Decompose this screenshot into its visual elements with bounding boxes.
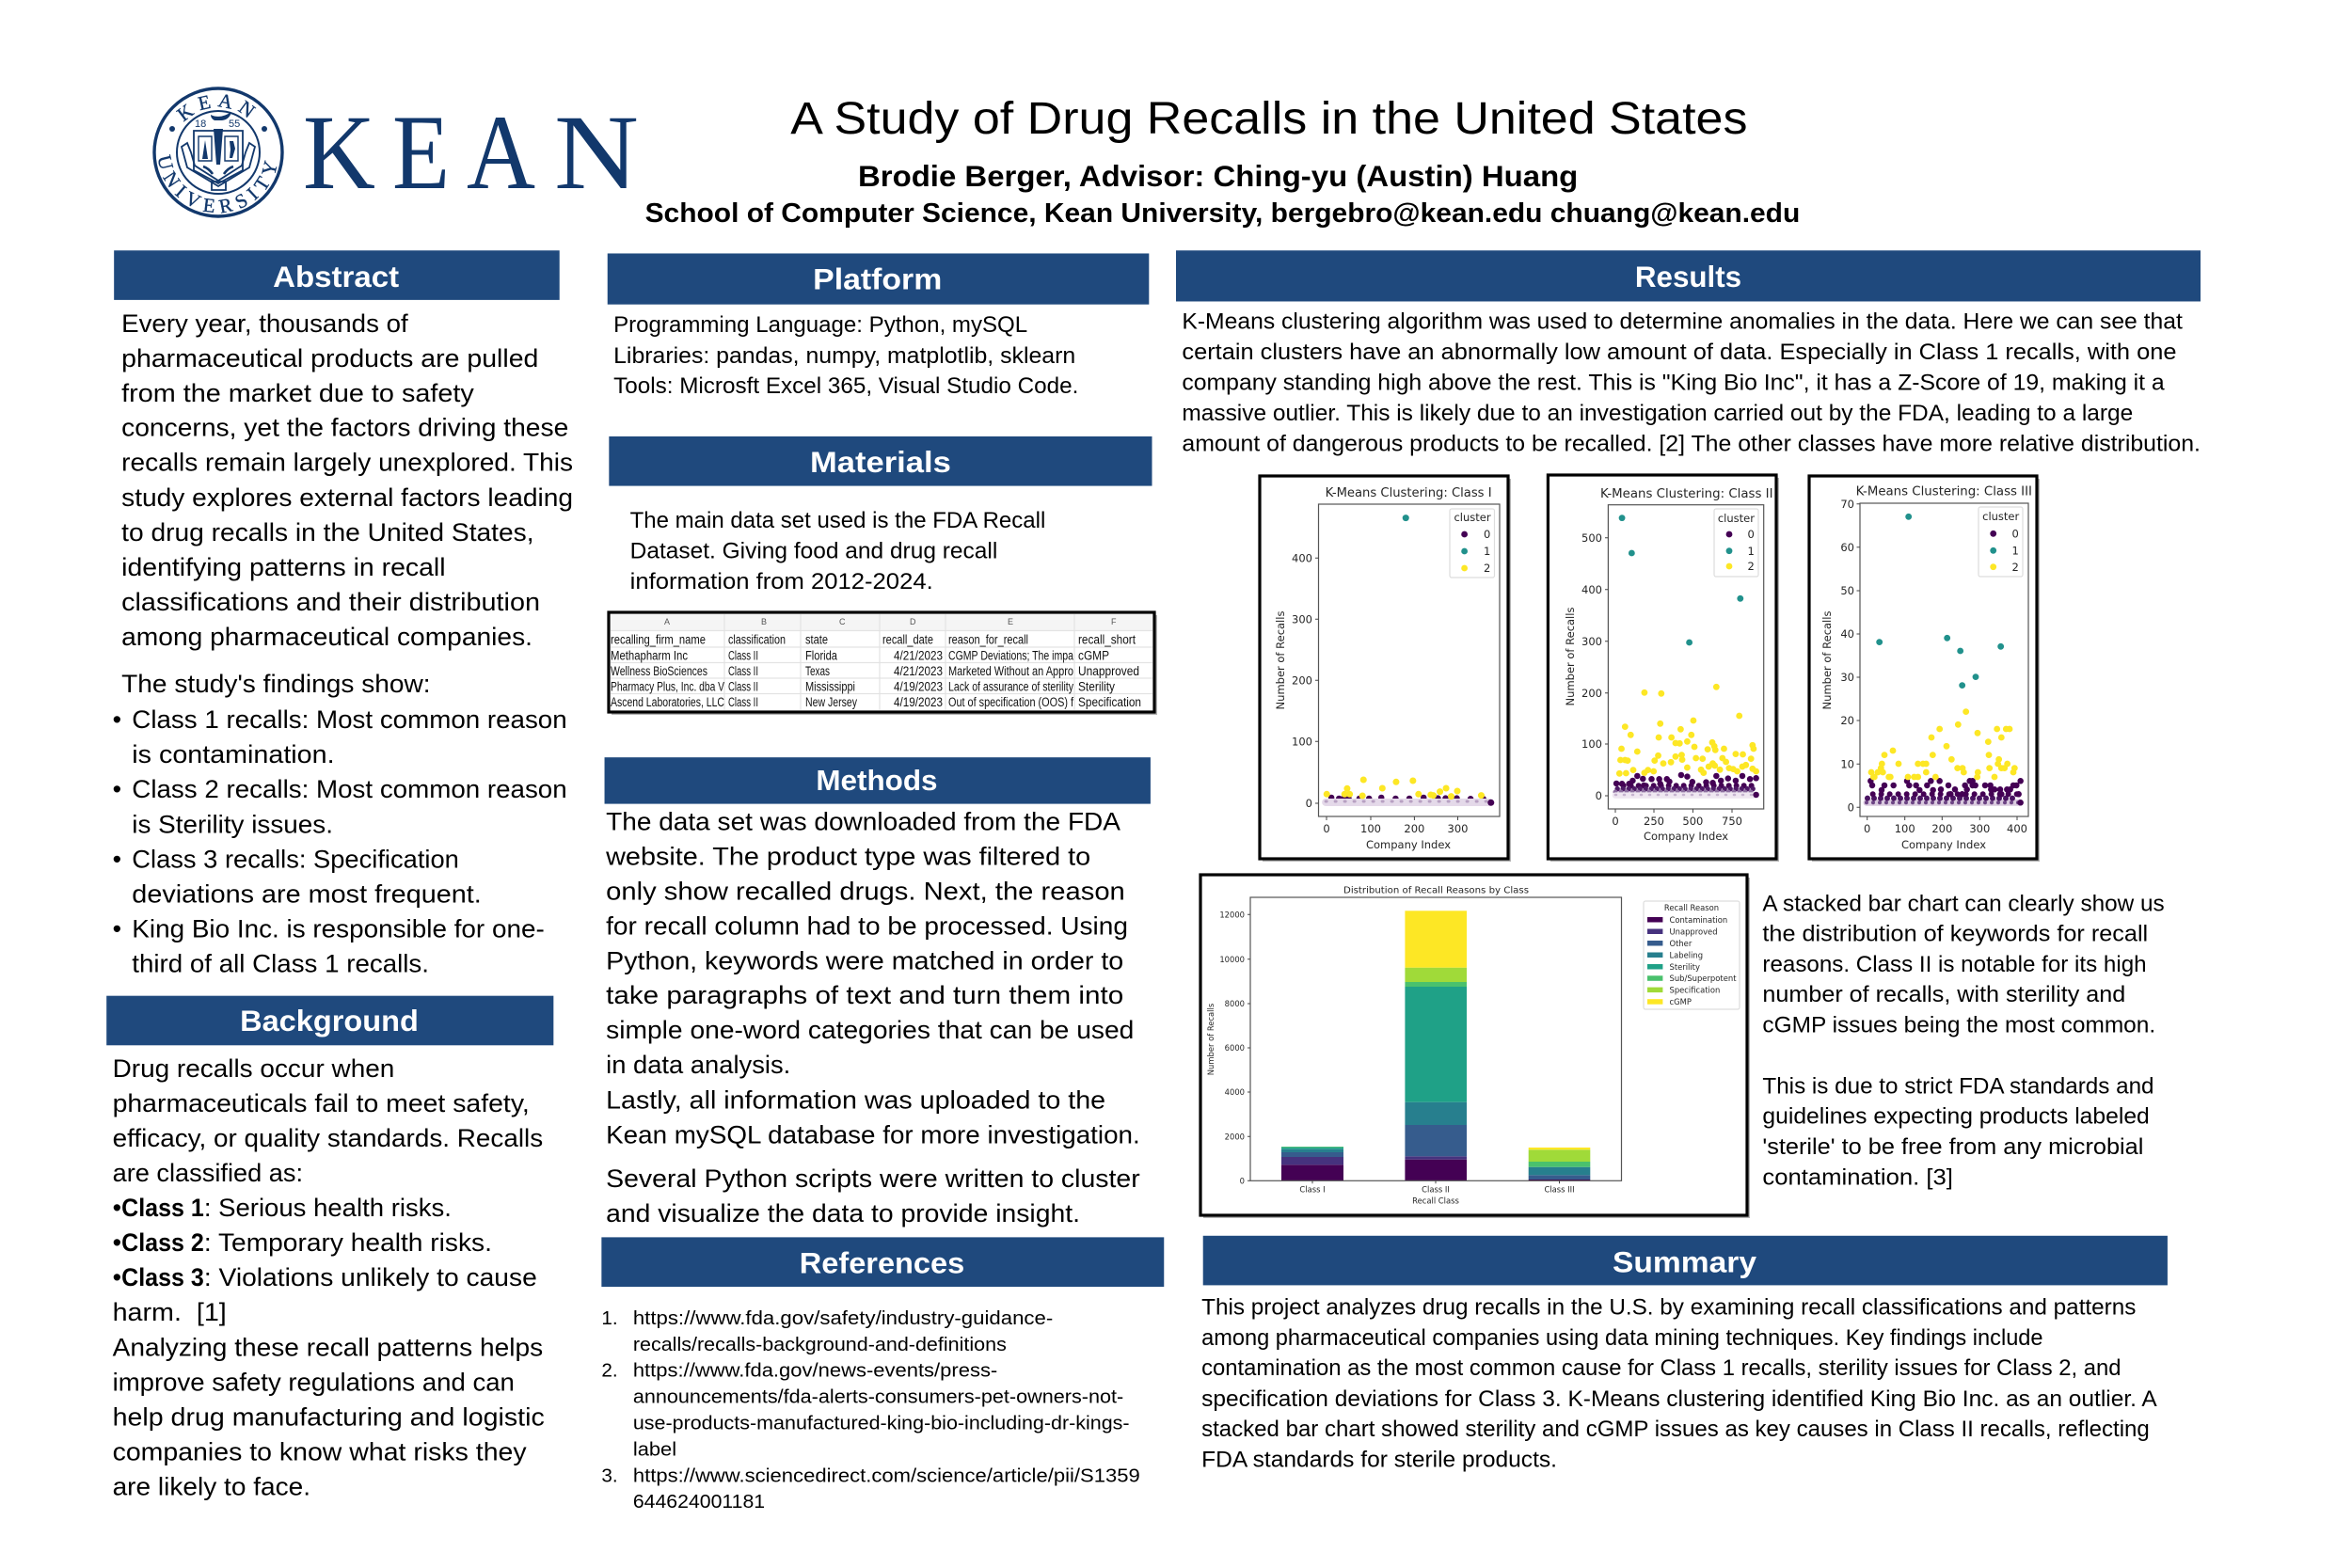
logo wordmark: A [467,94,535,212]
heading: Platform: Platform [813,262,942,296]
stacked bar chart: recall reasons by class [1200,875,1750,1218]
scatter plot: Class III: 40 [1840,627,1854,641]
scatter plot: Class III: 70 [1840,498,1854,511]
text block: background: Class 3 [121,1263,204,1291]
scatter plot: Class III: 200 [1931,822,1952,835]
scatter plot: Class I: K-Means Clustering: Class I [1326,486,1492,500]
legend: 2 [2011,561,2019,574]
icon: university seal: 18 [195,119,206,130]
bullet list: findings: • [113,775,121,803]
logo wordmark: K [303,94,375,212]
axes [1206,897,1622,1206]
heading: Materials [609,436,1152,486]
table: data sample: Pharmacy Plus, Inc. dba V [611,679,724,694]
text block: stacked bar commentary: A stacked bar chart can clearly show us [1762,891,2165,916]
text block: summary: contamination as the most common cause for Class 1 recalls, sterility issues for Class 2, and [1201,1355,2121,1381]
axes: 8000 [1225,999,1245,1008]
text block: methods [605,808,1140,1227]
table: data sample: Wellness BioSciences [611,664,707,678]
text block: background: Class 2 [121,1228,204,1257]
list: references: 2. [601,1360,618,1382]
heading: References: References [800,1246,964,1280]
scatter plot: Class II: 300 [1581,635,1602,648]
legend: 0 [1484,528,1490,541]
bullet list: findings: is contamination. [132,740,335,768]
heading: Background [106,996,553,1045]
text block: background [113,1054,545,1500]
list: references: https://www.fda.gov/news-events/press- [633,1360,997,1382]
scatter plot: Class III [1809,476,2040,862]
text block: background: : Temporary health risks. [204,1228,492,1257]
legend: cluster [1454,511,1491,524]
text block: summary: specification deviations for Class 3. K-Means clustering identified King Bio Inc. as an outlier. A [1201,1386,2158,1412]
table: data sample: recall_date [882,632,933,647]
data points [1867,516,2021,802]
text block: stacked bar commentary: reasons. Class II is notable for its high [1762,952,2147,977]
heading: References [601,1237,1164,1287]
scatter plot: Class I: 0 [1306,797,1312,810]
list: references: use-products-manufactured-king-bio-including-dr-kings- [633,1412,1130,1433]
text block: platform: Tools: Microsft Excel 365, Visual Studio Code. [613,373,1078,399]
text block: background: Drug recalls occur when [113,1054,394,1083]
scatter plot: Class II: 500 [1581,531,1602,545]
heading: Platform [608,253,1149,305]
legend [1450,509,1494,578]
legend: recall reason: Unapproved [1669,927,1718,937]
text block: background: are likely to face. [113,1472,310,1500]
legend: 0 [2011,527,2019,540]
table: data sample: C [839,617,846,626]
axes: 2000 [1225,1132,1245,1142]
table: data sample: E [1008,617,1013,626]
bullet list: findings: • [113,915,121,943]
bar: Class II [1405,911,1467,1180]
text block: background: • [113,1263,121,1291]
legend: recall reason: Sub/Superpotent [1669,974,1737,983]
bullet list: findings: Class 1 recalls: Most common reason [132,705,567,734]
text block: stacked bar commentary: cGMP issues being the most common. [1762,1013,2155,1038]
bullet list: findings: third of all Class 1 recalls. [132,950,429,978]
text block: stacked bar commentary: guidelines expecting products labeled [1762,1104,2150,1130]
scatter plot: Class II: 100 [1581,737,1602,751]
text block: background: • [113,1194,121,1222]
table: data sample: CGMP Deviations; The impa [948,649,1073,662]
legend: 1 [2011,544,2019,557]
plot frame [1608,505,1764,809]
legend: cluster [1982,510,2020,523]
axes: 6000 [1225,1043,1245,1053]
heading: Results: Results [1635,260,1741,293]
text block: abstract: identifying patterns in recall [121,553,446,581]
text block: methods: simple one-word categories that can be used [606,1016,1134,1044]
list: references: https://www.sciencedirect.com/science/article/pii/S1359 [633,1465,1140,1486]
scatter plot: Class I: 400 [1292,551,1312,564]
bullet list: findings: • [113,846,121,874]
scatter plot: Class III: 10 [1840,758,1854,771]
text block: stacked bar commentary: contamination. [3] [1762,1164,1953,1190]
scatter plot: Class I: 100 [1360,822,1381,835]
text block: summary [1201,1294,2158,1472]
legend: recall reason: Recall Reason [1664,903,1719,912]
heading: Methods [605,757,1151,804]
axes: Class II [1422,1185,1450,1195]
legend: 1 [1484,545,1490,558]
axes: 12000 [1219,911,1245,920]
heading: Background: Background [240,1004,419,1037]
text block: abstract: among pharmaceutical companies. [121,623,532,651]
heading: Abstract [114,250,560,300]
axes: 10000 [1219,955,1245,964]
axes: Class I [1299,1185,1326,1195]
text block: summary: FDA standards for sterile products. [1201,1447,1557,1472]
text block: methods: Several Python scripts were written to cluster [606,1164,1140,1193]
scatter plot: Class II: 200 [1581,687,1602,700]
legend: recall reason: Specification [1669,986,1720,995]
list: references [601,1307,1140,1513]
text block: platform [613,312,1078,399]
data points [1615,518,1756,796]
text block: results: K-Means clustering algorithm was used to determine anomalies in the data. Here we can see that [1182,309,2183,335]
text block: abstract: pharmaceutical products are pulled [121,344,538,372]
scatter plot: Class II: 750 [1722,815,1742,828]
table: data sample: Out of specification (OOS) f [948,695,1073,709]
text block: background: help drug manufacturing and logistic [113,1402,545,1431]
text block: abstract: classifications and their distribution [121,588,540,616]
table: data sample: Specification [1078,695,1141,709]
scatter plot: Class I: Company Index [1366,838,1451,851]
table: data sample: Sterility [1078,679,1115,694]
text block: background: Class 1 [121,1194,204,1222]
bullet list: findings: is Sterility issues. [132,810,333,838]
bar: Class I [1281,1147,1343,1180]
scatter plot: Class II: Company Index [1644,830,1728,843]
scatter plot: Class I: 100 [1292,736,1312,749]
heading: Results [1176,250,2201,301]
logo wordmark: E [392,94,450,212]
scatter plot: Class II: Number of Recalls [1564,608,1577,705]
scatter plot: Class I: 0 [1323,822,1330,835]
text block: stacked bar commentary [1762,891,2165,1190]
table: data sample: recall_short [1078,632,1136,647]
text block: abstract: recalls remain largely unexplored. This [121,449,573,477]
text block: background: : Violations unlikely to cause [204,1263,537,1291]
table: data sample: recalling_firm_name [611,632,706,647]
table: data sample: D [910,617,916,626]
legend [1979,507,2023,577]
bullet list: findings: Class 3 recalls: Specification [132,846,459,874]
plot frame [1319,504,1500,816]
axes: Recall Class [1412,1196,1459,1206]
legend: recall reason: Labeling [1669,950,1703,959]
data points [1326,518,1491,802]
list: references: announcements/fda-alerts-consumers-pet-owners-not- [633,1386,1123,1408]
text block: results [1182,309,2201,456]
logo wordmark [303,94,639,212]
text block: summary: stacked bar chart showed sterility and cGMP issues as key causes in Class II recalls, reflecting [1201,1417,2150,1442]
legend: 2 [1484,562,1490,575]
scatter plot: Class I: 300 [1292,613,1312,626]
scatter plot: Class II: 400 [1581,583,1602,596]
heading: Materials: Materials [810,445,951,479]
text block: abstract: to drug recalls in the United States, [121,518,534,546]
scatter plot: Class III: 0 [1848,801,1854,815]
text block: methods: Python, keywords were matched in order to [606,946,1123,974]
scatter plot: Class III: Number of Recalls [1820,611,1834,709]
scatter plot: Class III: 100 [1895,822,1915,835]
icon: university seal: 55 [229,119,240,130]
axes: 4000 [1225,1087,1245,1097]
table: data sample [609,612,1157,715]
table: data sample: Mississippi [805,679,855,694]
text block: abstract: from the market due to safety [121,379,474,407]
icon: university seal: UNIVERSITY [158,154,277,214]
text block: materials [630,508,1045,594]
bullet list: findings: • [113,705,121,734]
legend [1714,509,1758,577]
text block: results: certain clusters have an abnormally low amount of data. Especially in Class 1 recalls, with one [1182,340,2176,365]
table: data sample: 4/21/2023 [894,649,943,662]
authors: Brodie Berger, Advisor: Ching-yu (Austin) Huang [858,160,1578,193]
scatter plot: Class III: 0 [1864,822,1870,835]
text block: background: • [113,1228,121,1257]
logo: Kean University [152,87,639,218]
text block: abstract: concerns, yet the factors driving these [121,414,568,442]
table: data sample: F [1111,617,1117,626]
text block: results: amount of dangerous products to be recalled. [2] The other classes have more relative distribution. [1182,431,2201,456]
scatter plot: Class III: 30 [1840,671,1854,684]
scatter plot: Class II [1548,475,1779,862]
text block: methods: for recall column had to be processed. Using [606,911,1128,940]
text block: methods: website. The product type was filtered to [605,842,1090,870]
text block: background: Analyzing these recall patterns helps [113,1333,543,1361]
logo wordmark: N [554,94,639,212]
text block: abstract: study explores external factors leading [121,483,573,512]
table: data sample: 4/19/2023 [894,679,943,694]
bullet list: findings: Class 2 recalls: Most common reason [132,775,567,803]
table: data sample: New Jersey [805,695,857,709]
scatter plot: Class I: 300 [1448,822,1468,835]
table: data sample: Ascend Laboratories, LLC [611,695,724,709]
table: data sample: cGMP [1078,649,1109,662]
scatter plot: Class I [1260,476,1511,862]
table: data sample: Methapharm Inc [611,649,688,662]
scatter plot: Class I: 200 [1404,822,1424,835]
bar: Class III [1529,1148,1590,1180]
text block: background: companies to know what risks they [113,1437,527,1465]
title: A Study of Drug Recalls in the United States [790,94,1747,144]
table: data sample: Class II [728,649,758,662]
text block: summary: This project analyzes drug recalls in the U.S. by examining recall classifications and patterns [1201,1294,2136,1320]
table: data sample: Marketed Without an Appro [948,664,1073,678]
text block: abstract: Every year, thousands of [121,309,408,338]
text block: stacked bar commentary: This is due to strict FDA standards and [1762,1073,2154,1099]
text block: results: massive outlier. This is likely due to an investigation carried out by the FDA, leading to a large [1182,401,2133,426]
text block: materials: The main data set used is the FDA Recall [630,508,1045,533]
text block: stacked bar commentary: 'sterile' to be free from any microbial [1762,1134,2143,1160]
scatter plot: Class III: 60 [1840,541,1854,554]
list: references: 644624001181 [633,1491,765,1513]
scatter plot: Class II: K-Means Clustering: Class II [1600,487,1772,501]
icon: university seal: KEAN [176,94,256,122]
table: data sample: Texas [805,664,830,678]
chart title: Distribution of Recall Reasons by Class [1343,885,1529,895]
text block: methods: take paragraphs of text and turn them into [606,981,1123,1009]
scatter plot: Class II: 0 [1612,815,1619,828]
table: data sample: Unapproved [1078,664,1139,678]
table: data sample: Class II [728,679,758,694]
scatter plot: Class III: 50 [1840,584,1854,597]
text block: background: improve safety regulations and can [113,1368,515,1396]
table: data sample: reason_for_recall [948,632,1028,647]
table: data sample: Class II [728,664,758,678]
table: data sample: state [805,632,828,647]
heading: Methods: Methods [816,766,938,797]
list: references: 1. [601,1307,618,1329]
text block: summary: among pharmaceutical companies using data mining techniques. Key findings include [1201,1325,2043,1351]
scatter plot: Class III: K-Means Clustering: Class III [1856,485,2032,499]
text block: stacked bar commentary: the distribution of keywords for recall [1762,921,2148,946]
icon: university seal [152,87,284,218]
table: data sample: 4/19/2023 [894,695,943,709]
text block: platform: Programming Language: Python, mySQL [613,312,1027,338]
scatter plot: Class III: 400 [2007,822,2027,835]
text block: materials: information from 2012-2024. [630,569,933,594]
legend: recall reason: cGMP [1669,997,1692,1006]
axes: Class III [1544,1185,1575,1195]
legend: cluster [1718,512,1755,525]
plot frame [1860,503,2028,816]
affiliation: School of Computer Science, Kean University, bergebro@kean.edu chuang@kean.edu [645,198,1800,229]
legend: recall reason: Sterility [1669,962,1700,972]
scatter plot: Class III: 20 [1840,714,1854,727]
heading: Summary [1203,1236,2168,1285]
legend: recall reason [1644,901,1740,1009]
text block: abstract: The study's findings show: [121,670,431,698]
legend: 1 [1748,545,1755,558]
legend: 2 [1748,560,1755,573]
legend: recall reason: Other [1669,939,1692,948]
list: references: label [633,1438,676,1460]
heading: Summary: Summary [1613,1245,1756,1279]
bullet list: findings: King Bio Inc. is responsible for one- [132,915,545,943]
text block: background: harm. [1] [113,1298,227,1326]
table: data sample: classification [728,632,786,647]
scatter plot: Class I: Number of Recalls [1274,611,1287,709]
list: references: 3. [601,1465,618,1486]
table: data sample: B [761,617,767,626]
text block: background: pharmaceuticals fail to meet safety, [113,1089,530,1117]
scatter plot: Class I: 200 [1292,673,1312,687]
text block: methods: Kean mySQL database for more investigation. [606,1120,1140,1148]
text block: methods: The data set was downloaded from the FDA [606,808,1120,836]
text block: materials: Dataset. Giving food and drug recall [630,539,997,564]
list: references: recalls/recalls-background-and-definitions [633,1334,1007,1355]
legend: 0 [1748,528,1755,541]
scatter plot: Class II: 250 [1644,815,1664,828]
axes: Number of Recalls [1206,1004,1216,1075]
table: data sample: Florida [805,649,837,662]
text block: background: are classified as: [113,1159,303,1187]
scatter plot: Class III: 300 [1969,822,1990,835]
list: references: https://www.fda.gov/safety/industry-guidance- [633,1307,1053,1329]
text block: results: company standing high above the rest. This is "King Bio Inc", it has a Z-Score of 19, making it a [1182,371,2165,396]
bullet list: findings: deviations are most frequent. [132,880,482,909]
bullet list: findings [113,705,567,978]
scatter plot: Class II: 500 [1682,815,1703,828]
text block: methods: only show recalled drugs. Next, the reason [606,877,1125,905]
text block: methods: in data analysis. [606,1051,790,1079]
legend: recall reason: Contamination [1669,915,1727,925]
table: data sample: Class II [728,695,758,709]
table: data sample: 4/21/2023 [894,664,943,678]
heading: Abstract: Abstract [273,260,400,293]
text block: stacked bar commentary: number of recalls, with sterility and [1762,982,2125,1007]
text block: methods: and visualize the data to provide insight. [606,1199,1080,1227]
table: data sample: Lack of assurance of sterility [948,679,1073,694]
text block: methods: Lastly, all information was uploaded to the [606,1085,1105,1114]
scatter plot: Class II: 0 [1596,789,1602,802]
text block: platform: Libraries: pandas, numpy, matplotlib, sklearn [613,343,1075,369]
table: data sample: A [664,617,670,626]
text block: abstract [121,309,573,698]
text block: background: efficacy, or quality standards. Recalls [113,1124,543,1152]
text block: background: : Serious health risks. [204,1194,452,1222]
scatter plot: Class III: Company Index [1901,838,1986,851]
axes: 0 [1240,1176,1245,1185]
